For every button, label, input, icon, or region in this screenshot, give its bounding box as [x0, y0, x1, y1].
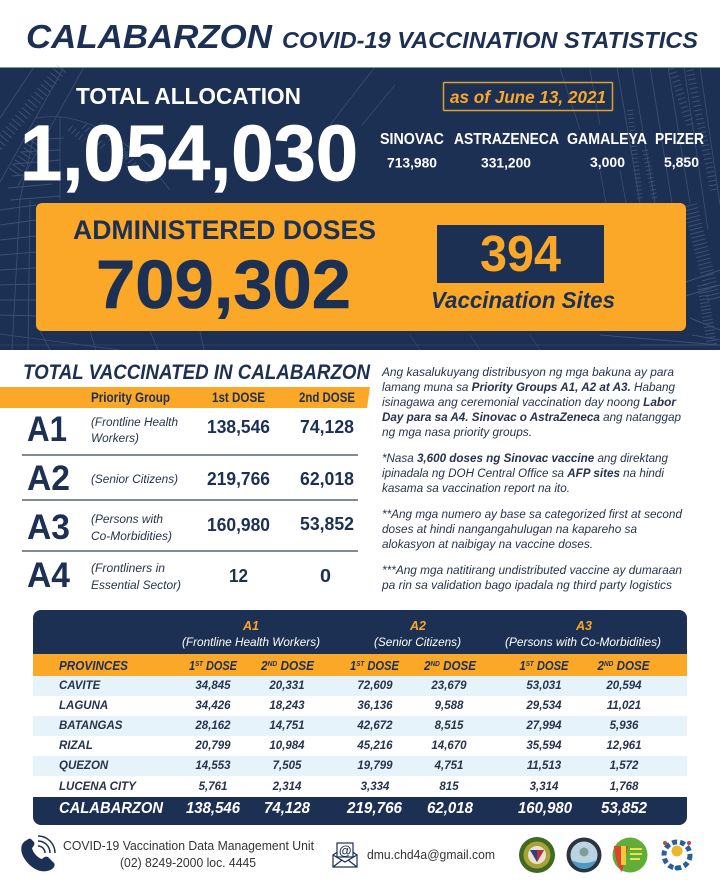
- row A2: (Senior Citizens): [91, 472, 178, 486]
- dose column headers: DOSE: [364, 659, 400, 673]
- vaccine brand breakdown: ASTRAZENECA: [454, 131, 559, 148]
- row: Cavite: [59, 680, 642, 692]
- dose column headers: ND: [604, 661, 613, 668]
- row: Quezon: 4,751: [434, 760, 463, 772]
- row A4: A4: [27, 556, 71, 595]
- heading: administered doses: ADMINISTERED DOSES: [73, 215, 376, 245]
- row: Calabarzon total: 53,852: [601, 800, 647, 817]
- title: CALABARZON: [26, 19, 273, 56]
- heading: total vaccinated: TOTAL VACCINATED IN CALABARZON: [23, 361, 371, 384]
- row: Cavite: CAVITE: [59, 680, 101, 692]
- text block: distribution notes: [381, 365, 683, 592]
- row A4: 0: [320, 565, 331, 586]
- row: Rizal: RIZAL: [59, 740, 93, 752]
- row: Lucena City: 3,334: [361, 781, 390, 793]
- row: Batangas: 42,672: [356, 720, 393, 732]
- text block: distribution notes: Ang kasalukuyang distribusyon ng mga bakuna ay para: [381, 365, 674, 379]
- row A2: 62,018: [300, 468, 354, 489]
- row: Batangas: BATANGAS: [59, 720, 123, 732]
- vaccine brand breakdown: 331,200: [481, 154, 531, 170]
- row: Laguna: 9,588: [435, 700, 464, 712]
- logo: green badge: [612, 838, 648, 872]
- row: Lucena City: 3,314: [530, 781, 559, 793]
- text block: distribution notes: ipinadala ng DOH Central Office sa AFP sites na hindi: [382, 466, 665, 480]
- row A1: 138,546: [207, 416, 270, 437]
- row: Batangas: [59, 720, 639, 732]
- row A3: 160,980: [207, 514, 270, 535]
- dose column headers: ND: [268, 661, 277, 668]
- dose column headers: ST: [526, 661, 534, 668]
- icon: email: [333, 843, 357, 867]
- row A1: A1: [27, 410, 67, 449]
- title: COVID-19 VACCINATION STATISTICS: [282, 27, 699, 53]
- vaccine brand breakdown: SINOVAC: [380, 131, 444, 148]
- row: Laguna: 11,021: [607, 700, 641, 712]
- text block: distribution notes: Day para sa A4. Sinovac o AstraZeneca ang natanggap: [382, 410, 681, 424]
- table header strip: Priority Group: [91, 390, 170, 405]
- row A3: 53,852: [300, 513, 354, 534]
- row: Cavite: 53,031: [526, 680, 562, 692]
- row: Cavite: 34,845: [195, 680, 231, 692]
- row A3: (Persons with: [91, 512, 163, 526]
- dose column headers: ST: [195, 661, 204, 668]
- row: Rizal: [59, 740, 642, 752]
- vaccine brand breakdown: GAMALEYA: [567, 131, 647, 148]
- date badge: [444, 82, 612, 110]
- row: Calabarzon total: CALABARZON: [59, 800, 164, 817]
- group headings: (Frontline Health Workers): [182, 635, 320, 649]
- dose column headers: 2: [261, 659, 268, 673]
- row: Rizal: 45,216: [356, 740, 393, 752]
- heading: total allocation: TOTAL ALLOCATION: [76, 83, 301, 109]
- dose column headers: ND: [430, 661, 440, 668]
- row: Calabarzon total: 138,546: [186, 800, 240, 817]
- dose column headers: DOSE: [203, 659, 238, 673]
- dose column headers: 2: [424, 659, 431, 673]
- row: Laguna: 18,243: [269, 700, 305, 712]
- row A2: A2: [27, 459, 70, 498]
- row A1: 74,128: [300, 416, 354, 437]
- text block: distribution notes: ng mga nasa priority groups.: [382, 425, 532, 439]
- row: Lucena City: 5,761: [199, 781, 227, 793]
- row A1: Workers): [91, 431, 139, 445]
- row A4: 12: [229, 565, 248, 586]
- row: Batangas: 8,515: [435, 720, 464, 732]
- footer: contact details: [21, 836, 692, 873]
- text block: distribution notes: doses at hindi nangangahulugan na kapareho sa: [382, 522, 637, 536]
- row: Calabarzon total: 160,980: [518, 800, 572, 817]
- row: Rizal: 10,984: [269, 740, 305, 752]
- logo: DOH seal: [519, 837, 555, 873]
- text block: distribution notes: **Ang mga numero ay base sa categorized first at second: [382, 507, 683, 521]
- vaccine brand breakdown: 5,850: [664, 154, 699, 170]
- row: Cavite: 23,679: [430, 680, 467, 692]
- dose column headers: 1: [189, 659, 196, 673]
- group headings: (Persons with Co-Morbidities): [505, 635, 661, 649]
- row: Calabarzon total: 62,018: [427, 800, 473, 817]
- text block: distribution notes: isinagawa ang ceremonial vaccination day noong Labor: [382, 395, 677, 409]
- row: Calabarzon total: 74,128: [264, 800, 310, 817]
- icon: email: @: [339, 843, 352, 858]
- group headings: A1: [242, 619, 259, 633]
- row: Rizal: 12,961: [606, 740, 642, 752]
- row: Batangas: 28,162: [194, 720, 231, 732]
- table header strip: 1st DOSE: [212, 390, 265, 405]
- row: Rizal: 14,670: [431, 740, 467, 752]
- row A4: [27, 556, 331, 595]
- row A4: (Frontliners in: [91, 561, 165, 575]
- vaccine brand breakdown: 713,980: [387, 154, 437, 170]
- icon: phone: [21, 836, 55, 871]
- row: Laguna: [59, 700, 641, 712]
- row: Quezon: 1,572: [610, 760, 639, 772]
- panel: allocation banner: [0, 67, 720, 350]
- row: Quezon: 19,799: [357, 760, 393, 772]
- dose column headers: [59, 659, 650, 673]
- row: Quezon: 11,513: [527, 760, 562, 772]
- total allocation number: 1,054,030: [20, 108, 358, 197]
- dose column headers: ST: [356, 661, 365, 668]
- phone contact text: [63, 839, 315, 870]
- dose column headers: DOSE: [534, 659, 569, 673]
- row: Rizal: 35,594: [526, 740, 562, 752]
- dose column headers: 1: [350, 659, 357, 673]
- dose column headers: 1: [520, 659, 526, 673]
- vaccination sites count: [437, 225, 604, 283]
- panel: administered doses card: [36, 203, 686, 331]
- dose column headers: PROVINCES: [59, 659, 129, 673]
- panel: provinces table: [33, 610, 687, 825]
- row: Lucena City: [59, 781, 639, 793]
- row: Lucena City: 1,768: [610, 781, 639, 793]
- dose column headers: 2: [598, 659, 604, 673]
- vaccination sites label: Vaccination Sites: [431, 287, 615, 313]
- vaccine brand breakdown: [380, 131, 704, 170]
- email address: dmu.chd4a@gmail.com: [367, 848, 495, 862]
- row A1: [27, 410, 354, 449]
- row: Cavite: 20,331: [268, 680, 305, 692]
- row: Quezon: 14,553: [195, 760, 231, 772]
- text block: distribution notes: kasama sa vaccination report na ito.: [382, 481, 570, 495]
- row A4: Essential Sector): [91, 578, 181, 592]
- group headings: (Senior Citizens): [374, 635, 461, 649]
- group headings: [182, 619, 661, 649]
- dose column headers: DOSE: [277, 659, 315, 673]
- row: Quezon: QUEZON: [59, 760, 109, 772]
- vaccination sites count: 394: [480, 225, 562, 282]
- row A2: 219,766: [207, 468, 270, 489]
- text block: distribution notes: pa rin sa validation bago ipadala ng third party logistics: [381, 578, 672, 592]
- dose column headers: DOSE: [613, 659, 650, 673]
- phone contact text: (02) 8249-2000 loc. 4445: [120, 856, 256, 870]
- row: Quezon: 7,505: [273, 760, 302, 772]
- row A1: (Frontline Health: [91, 415, 178, 429]
- row: Lucena City: 2,314: [272, 781, 302, 793]
- row: Batangas: 27,994: [525, 720, 562, 732]
- row: Batangas: 5,936: [610, 720, 639, 732]
- row: Laguna: LAGUNA: [59, 700, 108, 712]
- row: Cavite: 72,609: [357, 680, 393, 692]
- title: [26, 19, 699, 56]
- phone contact text: COVID-19 Vaccination Data Management Unit: [63, 839, 315, 853]
- group headings: A3: [575, 619, 592, 633]
- text block: distribution notes: *Nasa 3,600 doses ng Sinovac vaccine ang direktang: [382, 451, 668, 465]
- row: Batangas: 14,751: [269, 720, 305, 732]
- row: Calabarzon total: 219,766: [346, 800, 402, 817]
- panel: total vaccinated table: [0, 361, 371, 595]
- dose column headers: DOSE: [440, 659, 477, 673]
- table header strip: 2nd DOSE: [299, 390, 355, 405]
- text block: distribution notes: lamang muna sa Priority Groups A1, A2 at A3. Habang: [382, 380, 675, 394]
- vaccine brand breakdown: 3,000: [590, 154, 625, 170]
- row A3: [27, 508, 354, 547]
- text block: distribution notes: alokasyon at naibigay na vaccine doses.: [382, 537, 593, 551]
- row: Laguna: 36,136: [357, 700, 393, 712]
- row: Lucena City: 815: [439, 781, 459, 793]
- row A3: Co-Morbidities): [91, 529, 172, 543]
- row: Quezon: [59, 760, 639, 772]
- row: Rizal: 20,799: [194, 740, 231, 752]
- row A3: A3: [27, 508, 70, 547]
- administered doses number: 709,302: [96, 246, 351, 323]
- logo: people ring: [662, 840, 692, 870]
- row: Laguna: 34,426: [195, 700, 231, 712]
- vaccine brand breakdown: PFIZER: [655, 131, 704, 148]
- row: Laguna: 29,534: [525, 700, 562, 712]
- group headings: A2: [409, 619, 426, 633]
- table header strip: [0, 387, 370, 408]
- date badge: as of June 13, 2021: [450, 87, 606, 107]
- text block: distribution notes: ***Ang mga natitirang undistributed vaccine ay dumaraan: [382, 563, 682, 577]
- row: Calabarzon total: [59, 800, 647, 817]
- row: Cavite: 20,594: [605, 680, 642, 692]
- logo: regional seal: [566, 838, 602, 872]
- row: Lucena City: LUCENA CITY: [59, 781, 137, 793]
- row A2: [27, 459, 354, 498]
